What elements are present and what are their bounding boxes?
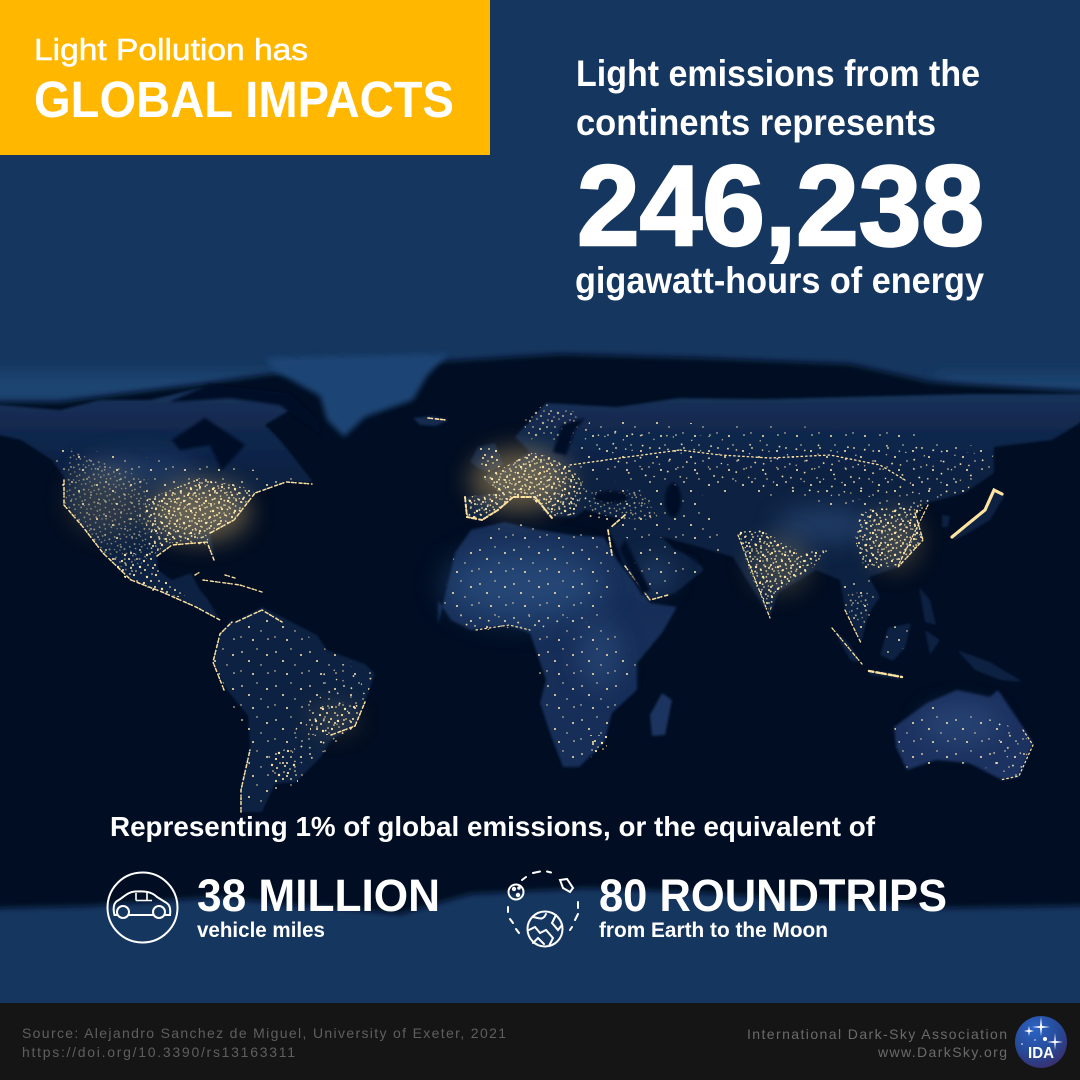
icon: earth moon orbit: [508, 872, 578, 946]
caption: from Earth to the Moon: [599, 918, 828, 942]
source link: https://doi.org/10.3390/rs13163311: [22, 1044, 295, 1060]
australia: [894, 690, 1033, 780]
sparse cluster overlay: [290, 425, 1033, 782]
organization website: www.DarkSky.org: [877, 1044, 1007, 1060]
caption: vehicle miles: [197, 918, 325, 942]
north america: [0, 388, 313, 620]
united kingdom and ireland: [470, 443, 503, 472]
number: 80 ROUNDTRIPS: [599, 870, 947, 921]
sparse light clusters: [40, 420, 1033, 812]
city lights: [40, 404, 1033, 812]
iceland: [413, 416, 449, 426]
world map at night: [0, 354, 1080, 914]
title box: [0, 0, 490, 155]
indonesia and philippines: [832, 587, 1023, 682]
intro line 2: continents represents: [576, 102, 936, 143]
equivalence heading: Representing 1% of global emissions, or the equivalent of: [110, 811, 876, 842]
headline statistic: [575, 53, 984, 301]
light glow underlay: [67, 448, 921, 734]
stat: vehicle miles: [108, 870, 440, 942]
title background: [0, 0, 490, 155]
japan and korea: [942, 490, 1005, 540]
madagascar: [650, 693, 672, 736]
dense cluster overlay: [65, 450, 927, 625]
tibet and arabia glow: [80, 456, 1000, 745]
number: 38 MILLION: [197, 870, 440, 921]
greenland: [265, 354, 448, 437]
title line 2: GLOBAL IMPACTS: [34, 71, 454, 128]
icon: IDA logo: IDA: [1028, 1045, 1054, 1062]
big number: 246,238: [577, 143, 984, 270]
bright coastlines and corridors: [64, 418, 1033, 812]
footer: [0, 1003, 1080, 1080]
dark water bodies: [170, 384, 700, 595]
sahara glow: [445, 551, 605, 619]
icon: car in circle: [108, 872, 178, 942]
intro line 1: Light emissions from the: [576, 53, 980, 94]
eurasia: [465, 394, 1080, 643]
unit line: gigawatt-hours of energy: [575, 260, 984, 301]
organization name: International Dark-Sky Association: [747, 1026, 1007, 1042]
dark ocean: [0, 354, 1080, 914]
footer bar: [0, 1003, 1080, 1080]
south america: [213, 607, 375, 812]
stat: moon roundtrips: [508, 870, 947, 946]
arctic ice glow: [0, 365, 1080, 402]
icon: IDA logo: [1015, 1016, 1067, 1068]
title line 1: Light Pollution has: [34, 32, 308, 67]
source citation: Source: Alejandro Sanchez de Miguel, University of Exeter, 2021: [22, 1025, 506, 1041]
africa: [438, 522, 677, 767]
dense light clusters: [105, 404, 927, 785]
night lands: [0, 388, 1080, 812]
